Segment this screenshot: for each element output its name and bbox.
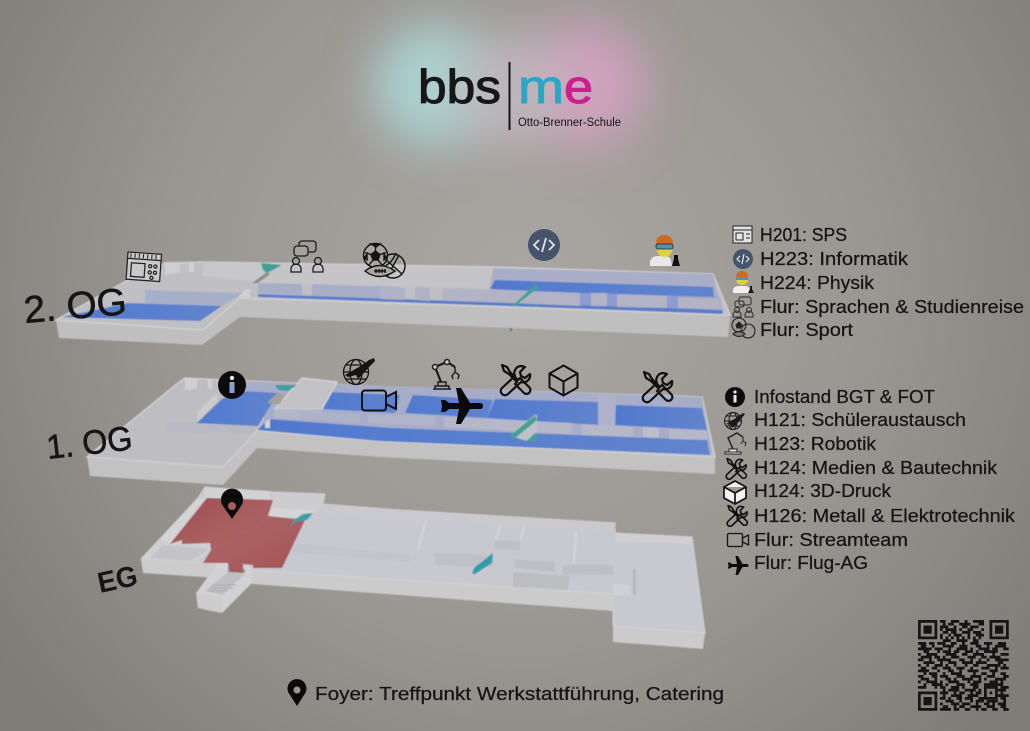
floor label: 2. OG: 2. OG — [22, 281, 128, 332]
icon: tools (metal) on map — [643, 372, 672, 402]
legend icon: Streamteam — [728, 534, 748, 546]
legend: 2. OG — [732, 225, 1024, 340]
legend icon: Medien & Bautechnik — [726, 459, 746, 479]
icon: physicist on map — [650, 235, 680, 266]
floor label: 1. OG: 1. OG — [45, 419, 134, 467]
legend item: Metall & Elektrotechnik: H126: Metall & Elektrotechnik — [754, 506, 1016, 526]
inner walls — [293, 543, 410, 562]
icon: robot arm on map — [432, 360, 459, 389]
legend item: Streamteam: Flur: Streamteam — [754, 530, 908, 550]
icon: SPS controller on map — [126, 252, 162, 282]
icon: people talking on map — [291, 241, 323, 272]
legend icon: Flug-AG — [728, 556, 748, 575]
icon: footer pin — [288, 679, 306, 706]
blue rooms — [197, 391, 278, 426]
icon: tools (media) on map — [501, 365, 530, 395]
logo: bbs|me Otto-Brenner-Schule: m — [518, 60, 564, 113]
legend icon: Sprachen — [733, 297, 753, 317]
icon: sports balls on map — [364, 244, 405, 278]
legend item: SPS: H201: SPS — [760, 225, 847, 245]
logo: bbs|me Otto-Brenner-Schule — [418, 60, 621, 130]
logo: bbs|me Otto-Brenner-Schule: e — [564, 60, 593, 113]
left corner room — [141, 539, 211, 562]
legend icon: SPS — [733, 226, 752, 243]
left wall — [160, 498, 205, 544]
stairs — [275, 385, 297, 391]
legend icon: Physik — [733, 271, 754, 293]
east section — [240, 381, 712, 454]
floor plan: 2. OG — [56, 262, 730, 345]
footer text: Foyer: Treffpunkt Werkstattführung, Catering — [315, 683, 724, 704]
inner walls — [300, 411, 360, 422]
floor — [141, 487, 705, 633]
icon: info on map — [218, 371, 246, 399]
QR code — [918, 621, 1009, 709]
legend item: Physik: H224: Physik — [760, 273, 875, 293]
icon: code badge on map — [528, 229, 560, 261]
left wing — [145, 290, 243, 306]
stairs — [261, 263, 282, 273]
corridor — [258, 294, 723, 314]
legend icon: Schüleraustausch — [724, 412, 745, 430]
legend item: Infostand: Infostand BGT & FOT — [754, 387, 935, 407]
floor plan: 1. OG — [87, 378, 715, 485]
front walls — [141, 559, 218, 578]
icon: globe with plane on map — [344, 358, 375, 384]
legend item: 3D-Druck: H124: 3D-Druck — [754, 481, 892, 501]
stairwell — [196, 563, 253, 613]
pillar between rooms — [598, 394, 616, 427]
icon: airplane on map — [441, 388, 483, 424]
legend icon: 3D-Druck — [724, 481, 746, 504]
floor plan: EG — [141, 487, 705, 649]
icon: 3D cube on map — [550, 366, 578, 396]
inner walls — [258, 283, 302, 295]
logo glow — [373, 23, 645, 148]
wing inner wall — [167, 421, 258, 434]
stairs teal — [290, 513, 313, 527]
logo: bbs|me Otto-Brenner-Schule: Otto-Brenner-Schule — [518, 117, 621, 129]
floor label: EG: EG — [95, 560, 141, 600]
legend item: Flug-AG: Flur: Flug-AG — [754, 553, 868, 573]
legend: 1. OG — [724, 387, 1016, 575]
icon: video camera on map — [362, 390, 396, 410]
blue room H223 — [490, 280, 714, 297]
legend icon: Robotik — [725, 433, 746, 454]
side room block — [275, 378, 337, 409]
legend item: Robotik: H123: Robotik — [754, 434, 877, 454]
outer walls — [87, 432, 715, 485]
east section — [490, 268, 722, 312]
legend item: Sprachen & Studienreise: Flur: Sprachen & Studienreise — [760, 297, 1024, 317]
footer note: Foyer — [288, 679, 724, 706]
legend icon: Sport — [732, 318, 755, 338]
legend item: Informatik: H223: Informatik — [760, 249, 909, 269]
legend icon: Infostand — [725, 387, 745, 407]
red foyer — [170, 498, 305, 573]
outer walls — [56, 298, 730, 345]
icon: location pin on map — [221, 489, 243, 519]
legend item: Medien & Bautechnik: H124: Medien & Bautechnik — [754, 458, 998, 478]
logo: bbs|me Otto-Brenner-Schule: bbs — [418, 60, 501, 113]
legend icon: Informatik — [733, 249, 753, 269]
legend item: Schüleraustausch: H121: Schüleraustausch — [754, 410, 966, 430]
legend icon: Metall & Elektrotechnik — [727, 506, 747, 526]
legend item: Sport: Flur: Sport — [760, 320, 853, 340]
